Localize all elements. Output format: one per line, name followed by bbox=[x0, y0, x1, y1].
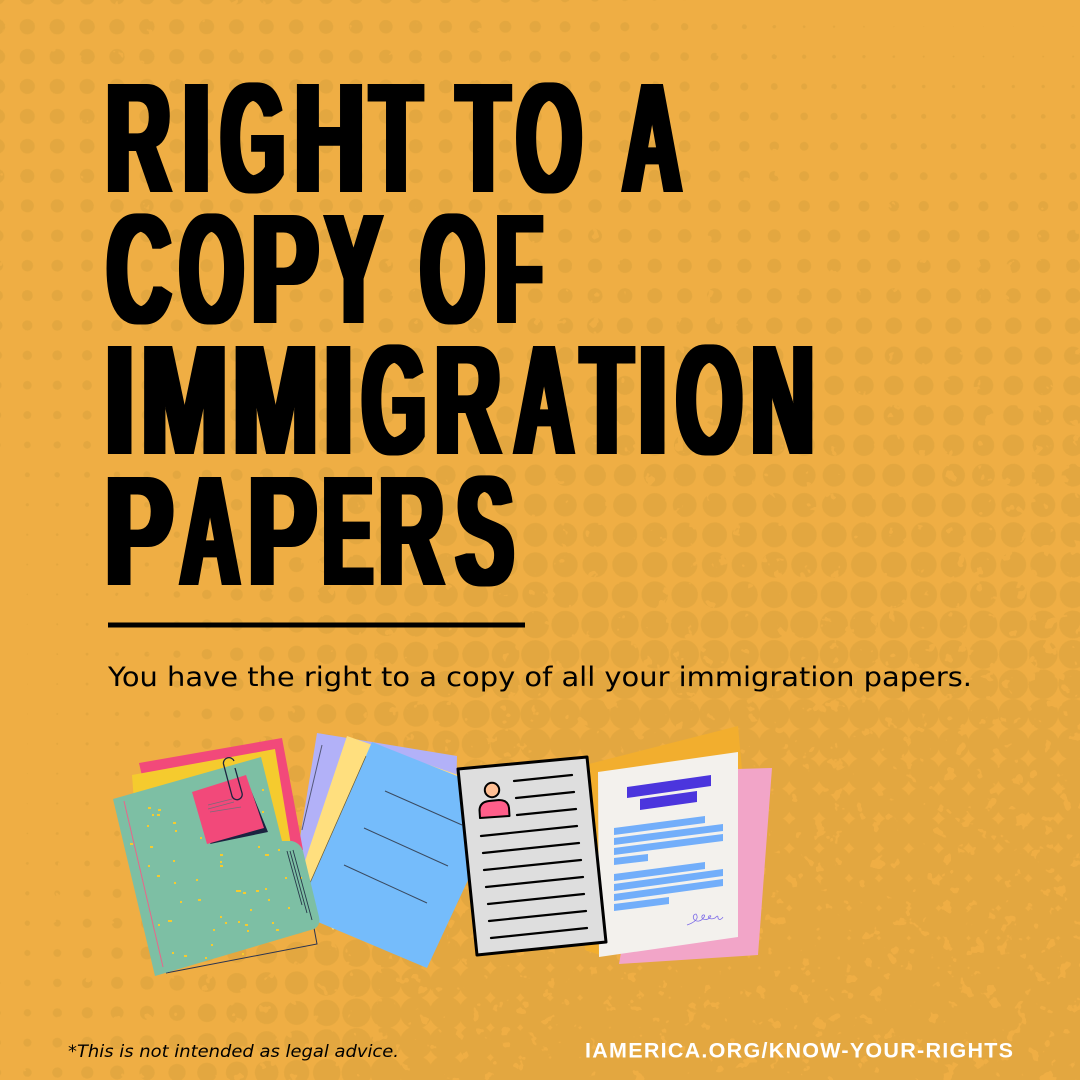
letter body bars bbox=[614, 816, 723, 911]
yellow sheet bbox=[303, 736, 458, 930]
title: A bbox=[180, 444, 240, 619]
paper clip bbox=[223, 758, 242, 800]
pink sticky note bbox=[192, 775, 264, 844]
title: R bbox=[106, 51, 171, 226]
title: P bbox=[105, 444, 173, 619]
title: O bbox=[421, 182, 485, 357]
letter heading bars bbox=[627, 775, 711, 810]
document sheet bbox=[458, 757, 606, 955]
title: M bbox=[141, 313, 228, 488]
title: F bbox=[496, 182, 542, 357]
flap lines bbox=[287, 850, 312, 920]
yellow back page bbox=[132, 749, 291, 880]
title: M bbox=[233, 313, 318, 488]
title: C bbox=[107, 182, 171, 357]
pink back sheet bbox=[619, 768, 772, 964]
title: H bbox=[294, 51, 365, 226]
green folder body bbox=[113, 757, 319, 976]
title: R bbox=[435, 313, 501, 488]
illustration: stack of loose papers bbox=[298, 733, 472, 968]
title: A bbox=[623, 51, 681, 226]
pink back page bbox=[139, 738, 303, 875]
yellow specks bbox=[130, 790, 302, 958]
title: I bbox=[638, 313, 668, 488]
title: I bbox=[323, 313, 354, 488]
illustration: letter with signature bbox=[585, 726, 772, 964]
title: I bbox=[182, 51, 211, 226]
title: O bbox=[517, 51, 582, 226]
title: Y bbox=[326, 182, 381, 357]
white letter sheet bbox=[598, 752, 738, 957]
folder back edge line bbox=[166, 928, 317, 973]
orange back sheet bbox=[585, 726, 742, 955]
title: P bbox=[248, 444, 317, 619]
title: R bbox=[379, 444, 444, 619]
title: T bbox=[371, 51, 421, 226]
person body bbox=[480, 800, 510, 818]
title: S bbox=[456, 444, 514, 619]
title: A bbox=[514, 313, 574, 488]
disclaimer: *This is not intended as legal advice. bbox=[68, 1042, 399, 1061]
sticky note lines bbox=[208, 799, 241, 812]
website url: IAMERICA.ORG/KNOW-YOUR-RIGHTS bbox=[585, 1038, 1013, 1062]
blue sheet bbox=[305, 742, 472, 968]
person head bbox=[485, 783, 499, 797]
illustration: profile document bbox=[458, 757, 606, 955]
title bbox=[105, 51, 814, 619]
title: N bbox=[751, 313, 814, 488]
title: G bbox=[221, 51, 285, 226]
title: G bbox=[362, 313, 426, 488]
subtitle: You have the right to a copy of all your immigration papers. bbox=[107, 662, 972, 693]
signature bbox=[687, 914, 723, 925]
document text lines bbox=[481, 775, 587, 938]
title: O bbox=[676, 313, 742, 488]
folder spine line bbox=[124, 801, 163, 967]
lavender sheet bbox=[298, 733, 457, 900]
sticky note shadow bbox=[210, 783, 268, 844]
title: T bbox=[457, 51, 509, 226]
title: T bbox=[581, 313, 632, 488]
divider rule bbox=[108, 622, 525, 628]
title: E bbox=[323, 444, 372, 619]
title: P bbox=[251, 182, 318, 357]
illustration: green folder bbox=[113, 738, 319, 976]
title: O bbox=[180, 182, 244, 357]
lines on blue sheet bbox=[344, 791, 462, 903]
title: I bbox=[105, 313, 135, 488]
